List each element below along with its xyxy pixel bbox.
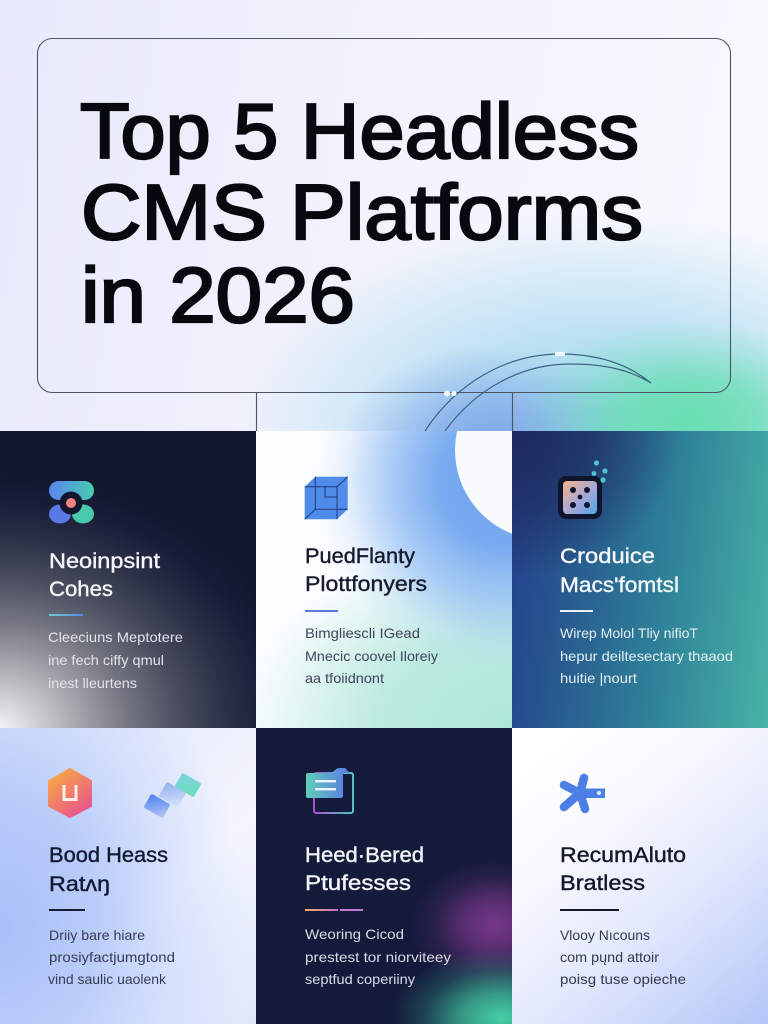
card title (560, 545, 679, 597)
title: CMS Platforms (81, 168, 643, 256)
rule (49, 909, 85, 911)
title (80, 87, 643, 339)
card title: Ratʌŋ (49, 873, 110, 896)
card title (560, 844, 686, 895)
title: Top 5 Headless (80, 87, 639, 175)
card text (560, 625, 733, 686)
icon: cube (305, 477, 348, 519)
card text: huitie |nourt (560, 670, 637, 686)
rule (305, 610, 338, 612)
card text: septfud coperiiny (305, 971, 415, 987)
card text: vind saulic uaolenk (48, 971, 167, 987)
card text: Bimgliescli IGead (305, 625, 420, 641)
card title (49, 550, 160, 601)
card title: RecumAluto (560, 844, 686, 867)
rule (49, 614, 83, 616)
panel: Heed-Bered Ptufesses (256, 728, 512, 1024)
card text: Cleeciuns Meptotere (48, 629, 183, 645)
card text (305, 926, 451, 987)
card title (305, 844, 424, 895)
card text (305, 625, 438, 686)
icon: asterisk key (564, 778, 605, 809)
icon: hexagon (49, 769, 91, 817)
panel: Croduice Macsfomtsl (512, 431, 768, 728)
card title: Ptufesses (305, 872, 411, 895)
panel: RecumAluto Bratless (512, 728, 768, 1024)
card title: Bood Heass (49, 844, 168, 867)
card text: prestest tor niorviteey (305, 949, 451, 965)
card title: Bratless (560, 872, 645, 895)
card text (48, 927, 175, 987)
connector lines (256, 392, 512, 431)
card text: aa tfoiidnont (305, 670, 384, 686)
card title: Heed·Bered (305, 844, 424, 867)
icon: dice (558, 460, 608, 519)
icon: folder (306, 768, 353, 813)
card title (49, 844, 168, 896)
icon: linked blobs (49, 481, 94, 524)
card text: ine fech ciffy qmul (48, 652, 164, 668)
card title: PuedFlanty (305, 545, 416, 568)
card text: Vlooy Nıcouns (560, 927, 650, 943)
panel: PuedFlanty Plottfonyers (256, 431, 512, 728)
card text: Mnecic coovel Iloreiy (305, 648, 438, 664)
card text: inest lleurtens (48, 675, 137, 691)
card title: Cohes (49, 578, 113, 601)
card title (305, 545, 427, 596)
rule (560, 610, 593, 612)
card title: Macs'fomtsl (560, 574, 679, 597)
card title: Neoinpsint (49, 550, 160, 573)
card title: Croduice (560, 545, 655, 568)
card text: Wirep Molol Tliy nifioT (560, 625, 698, 641)
panel: Bood Heass Ratan (0, 728, 256, 1024)
card title: Plottfonyers (305, 573, 427, 596)
icon: stacked tiles (143, 773, 202, 818)
card text: hepur deiltesectary thaaod (560, 648, 733, 664)
rule (560, 909, 619, 911)
white circle (455, 360, 635, 540)
card text: Weoring Cicod (305, 926, 404, 942)
card text: com pųnd attoir (560, 949, 659, 965)
header panel (0, 0, 768, 431)
panel: Neoinpsint Cohes (0, 431, 256, 728)
title: in 2026 (81, 251, 355, 339)
card text: prosiyfactjumgtond (49, 949, 175, 965)
decorative arcs (425, 352, 651, 431)
card text: Driiy bare hiare (49, 927, 145, 943)
rule (305, 909, 363, 911)
card text: poisg tuse opieche (560, 971, 686, 987)
card text (560, 927, 686, 987)
title box outline (38, 38, 730, 392)
card text (48, 629, 183, 691)
